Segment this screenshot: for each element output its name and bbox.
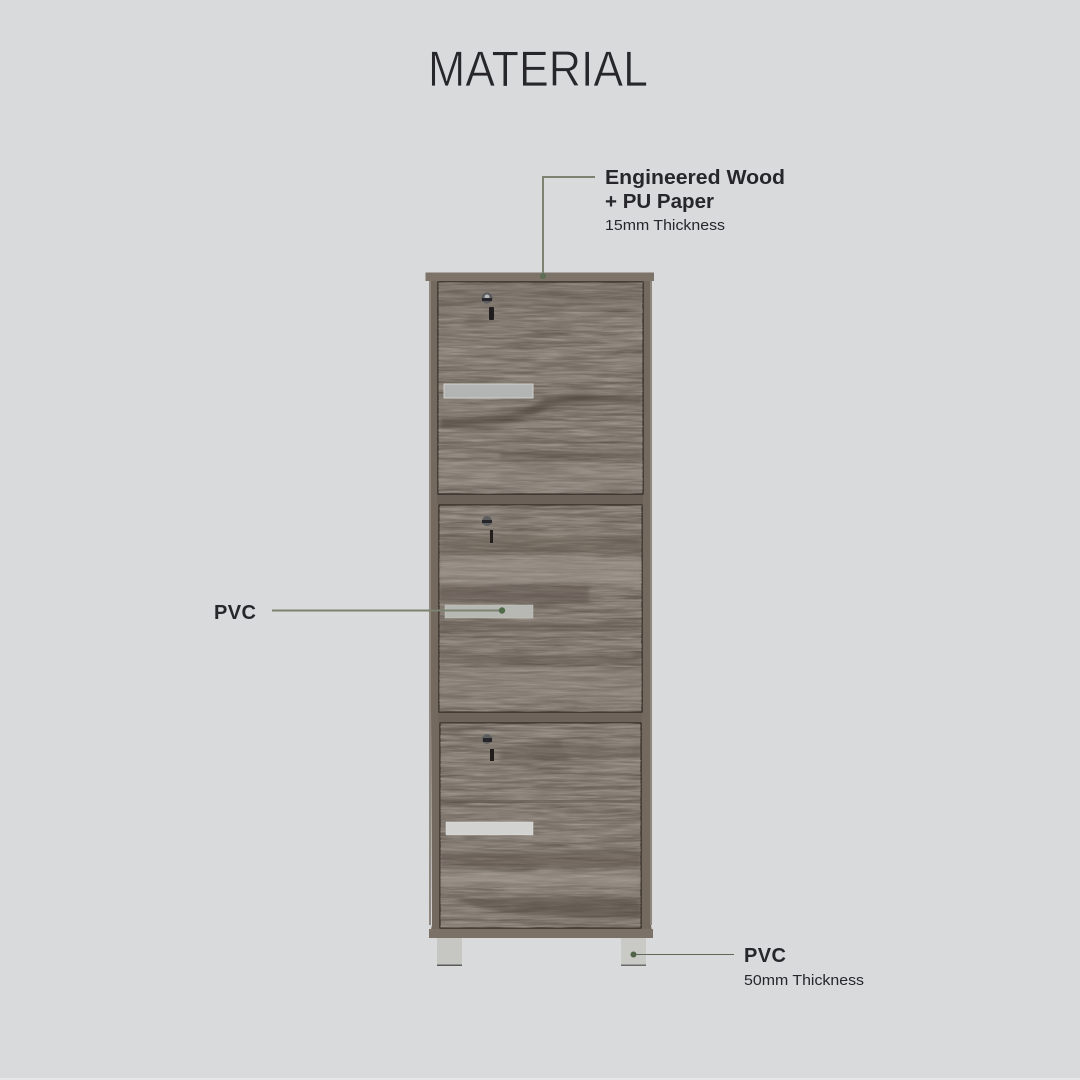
label: engineered wood: 15mm Thickness — [605, 217, 725, 234]
handle 1 — [444, 384, 533, 398]
label: engineered wood — [605, 167, 785, 234]
marker dot: foot — [630, 952, 636, 958]
label: engineered wood: Engineered Wood — [605, 167, 785, 189]
foot left — [437, 938, 462, 966]
door 2 — [439, 505, 642, 712]
handle 3 — [446, 822, 533, 835]
label: PVC feet — [744, 945, 864, 989]
door 1 — [438, 282, 643, 494]
lock 2 — [482, 516, 493, 543]
top board — [426, 272, 654, 281]
leader line: top — [543, 177, 595, 276]
label: engineered wood: + PU Paper — [605, 191, 714, 213]
title: MATERIAL — [428, 41, 648, 97]
marker dot: handle — [499, 607, 505, 614]
bottom board — [429, 929, 653, 938]
foot right — [621, 938, 646, 966]
handle 2 — [445, 605, 533, 618]
lock 3 — [482, 734, 494, 761]
callout: PVC feet — [630, 945, 864, 989]
label: PVC feet: 50mm Thickness — [744, 972, 864, 989]
door 3 — [440, 723, 641, 928]
leader line: handle — [272, 610, 502, 612]
label: PVC feet: PVC — [744, 945, 786, 967]
label: PVC handle: PVC — [214, 602, 256, 624]
cabinet — [426, 272, 654, 966]
cabinet carcass — [429, 281, 653, 938]
marker dot: top — [540, 273, 546, 279]
callout: PVC handle — [214, 602, 505, 624]
leader line: foot — [633, 954, 734, 956]
lock 1 — [482, 292, 494, 320]
callout: engineered wood — [540, 167, 785, 279]
